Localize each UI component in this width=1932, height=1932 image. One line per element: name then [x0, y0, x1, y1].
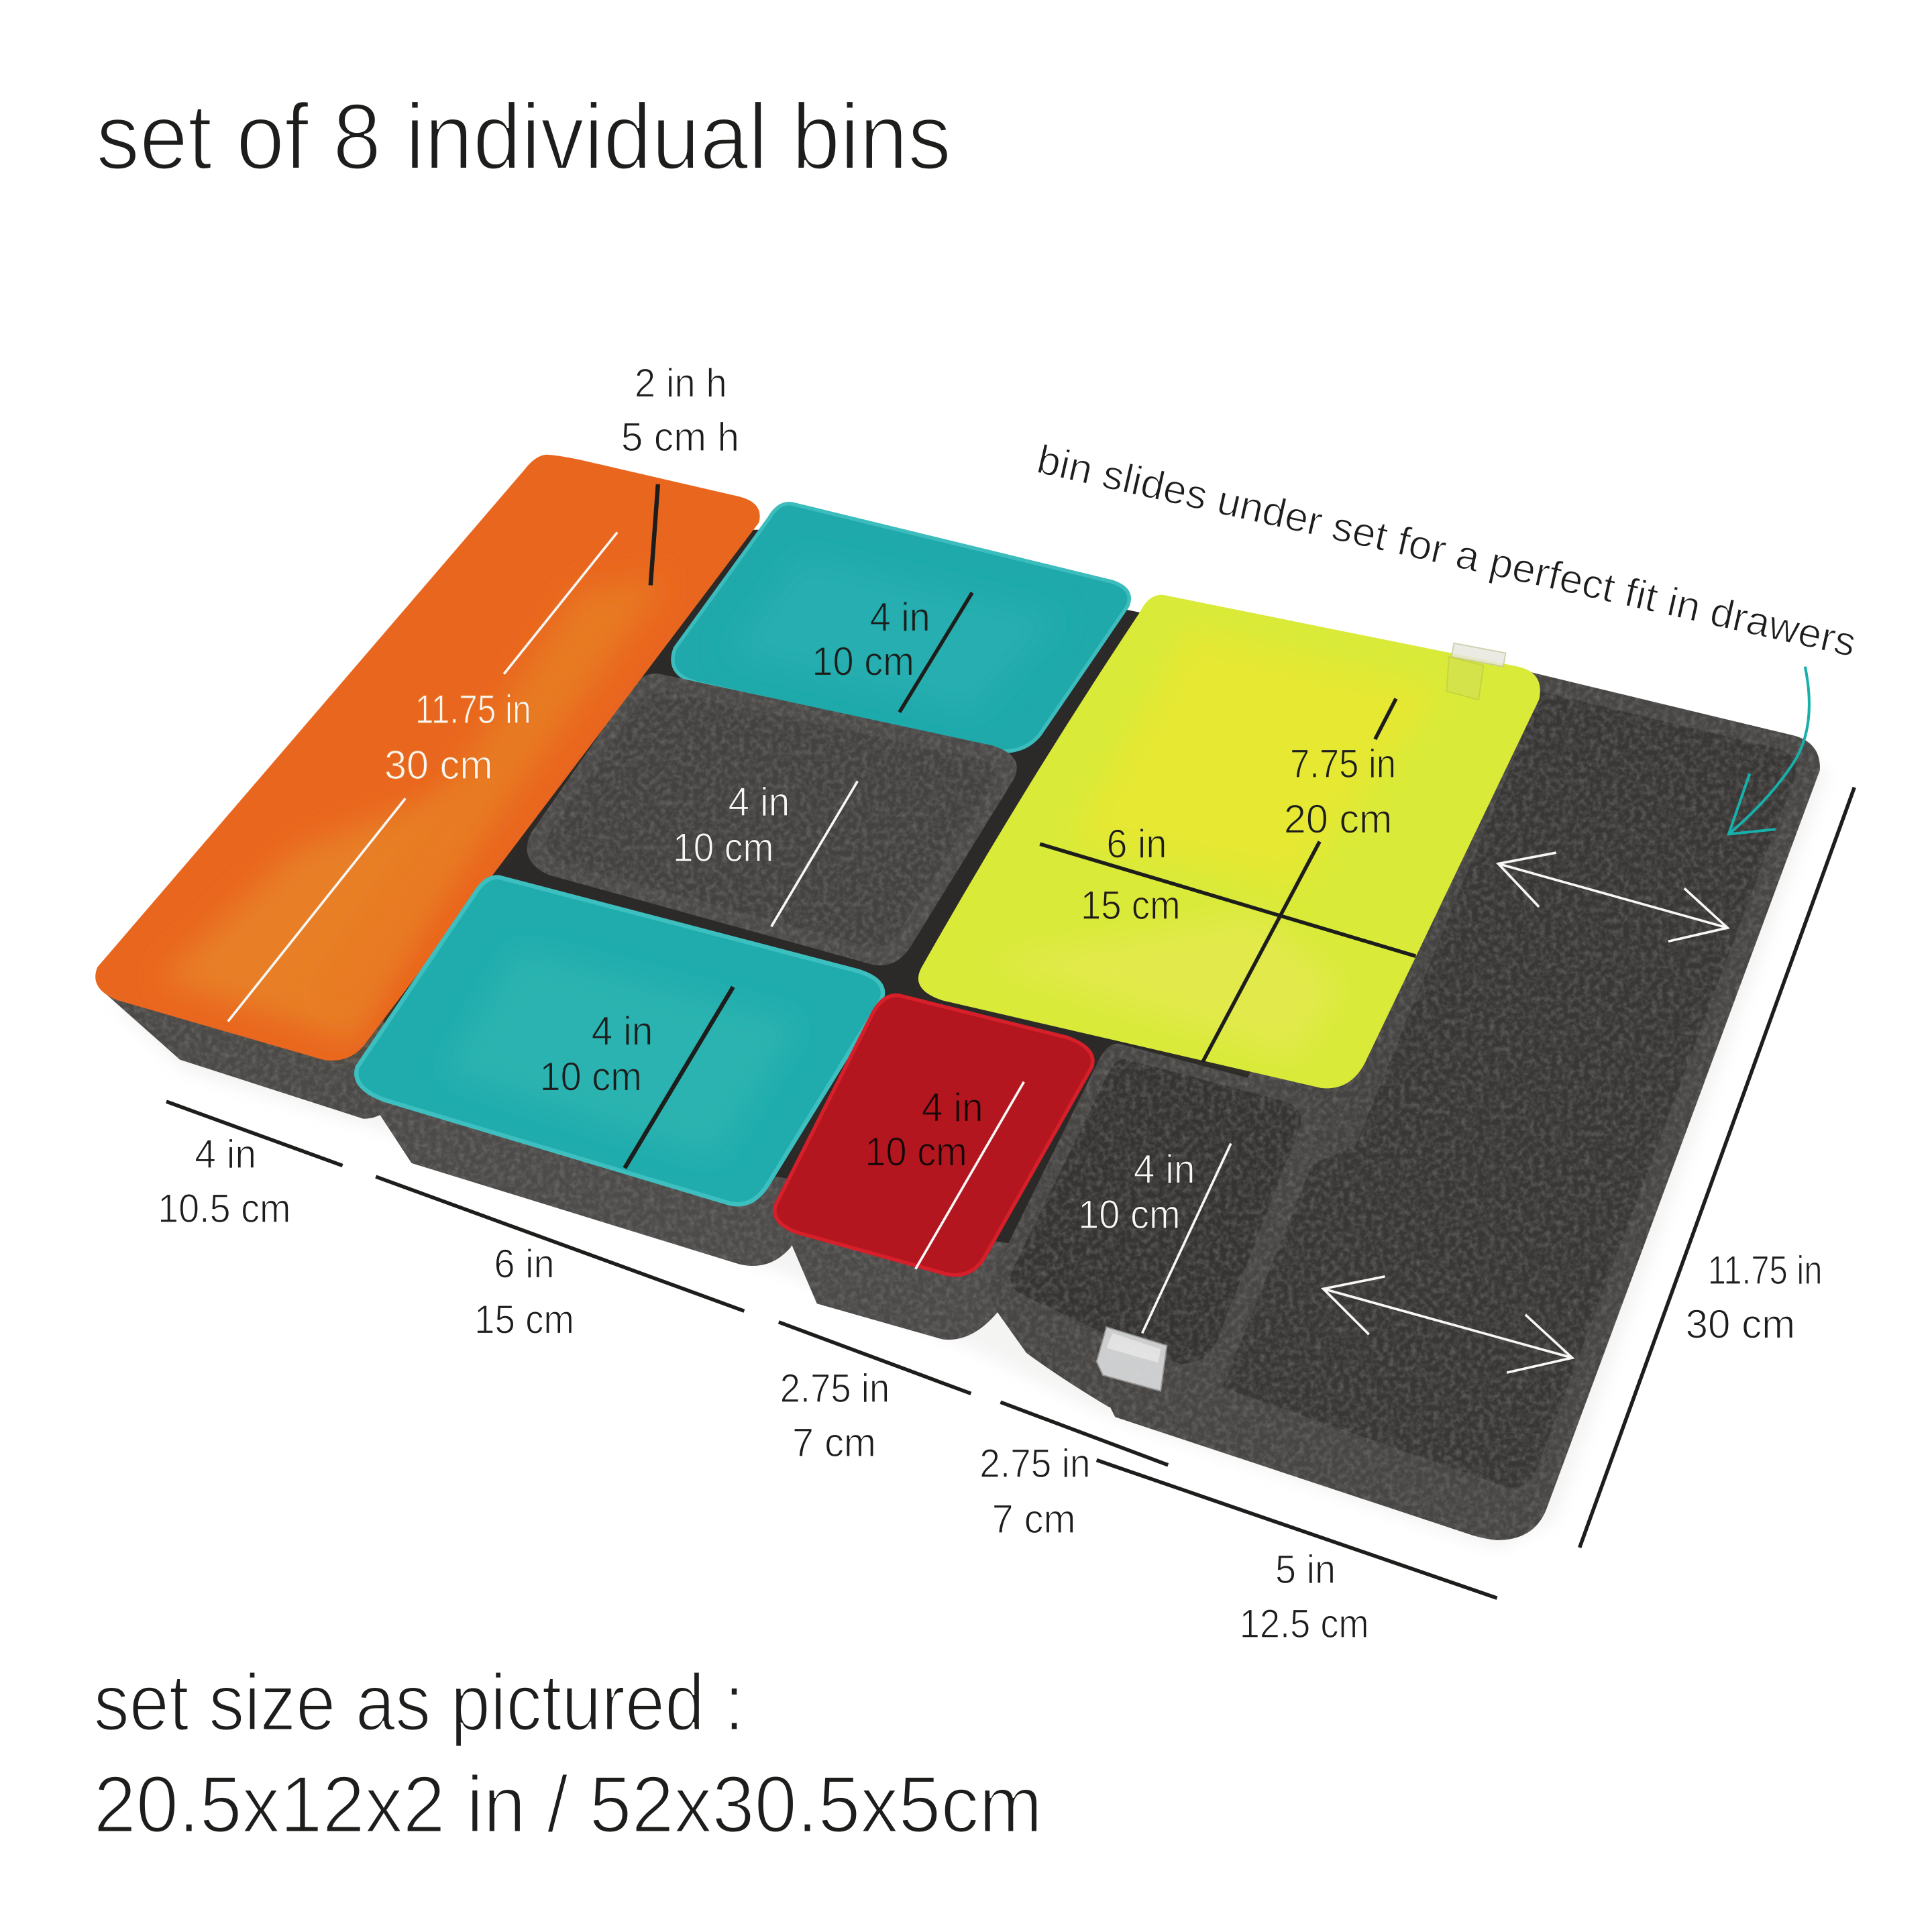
teal front floor	[443, 949, 801, 1159]
bin: red	[775, 996, 1093, 1340]
lime bin interior	[918, 595, 1540, 1088]
orange bin interior	[95, 455, 760, 1061]
acrylic clip on lime bin	[1446, 643, 1505, 700]
label: orange 11.75 in: 30 cm	[384, 742, 493, 788]
teal top interior	[673, 504, 1129, 751]
lime bin side wall	[1281, 720, 1528, 1152]
tray body	[1097, 672, 1820, 1540]
arrow: upper double-headed slide arrow	[1498, 853, 1727, 941]
soft ground shadow	[111, 739, 1830, 1550]
dimension line: teal top	[900, 592, 972, 712]
bin: lime large	[918, 595, 1540, 1152]
tray floor	[1222, 690, 1796, 1487]
title: set of 8 individual bins	[96, 85, 951, 189]
dimension line: 2.75 in bottom	[779, 1322, 971, 1393]
dimension line: lime length upper	[1375, 698, 1396, 739]
label: lime 6 in	[1081, 820, 1181, 928]
red bin interior	[775, 996, 1093, 1275]
charcoal middle body	[527, 674, 1017, 965]
label: teal front 4 in: 4 in	[592, 1008, 653, 1054]
charcoal middle floor	[546, 690, 996, 947]
red bin outer wall	[784, 1226, 1016, 1340]
label: 2 in h: 5 cm h	[621, 414, 739, 460]
label: second bottom 2.75 in: 2.75 in	[979, 1440, 1091, 1486]
set size values: 20.5x12x2 in / 52x30.5x5cm	[94, 1760, 1042, 1849]
label: bottom 5 in: 12.5 cm	[1240, 1601, 1369, 1646]
dimension line: second 2.75 in bottom	[1000, 1402, 1168, 1465]
arrow: lower double-headed slide arrow	[1324, 1277, 1572, 1373]
dimension line: teal front	[625, 987, 733, 1168]
gaps between bins: dark underlay	[351, 530, 1515, 1306]
dimension line: 11.75 in right	[1580, 788, 1854, 1548]
label: bottom 5 in: 5 in	[1275, 1546, 1336, 1592]
bin: orange long	[95, 455, 760, 1119]
dimension line: 6 in bottom	[376, 1177, 744, 1311]
dimension line: small charcoal	[1142, 1143, 1231, 1333]
label: bottom 6 in	[474, 1241, 574, 1342]
label: teal top 4 in: 4 in	[870, 594, 930, 639]
label: orange 11.75 in	[384, 686, 531, 788]
dimension line: orange lower	[228, 798, 405, 1022]
callout: slanted note: bin slides under set for a perfect fit in drawers	[1033, 436, 1860, 665]
dimension line: bin height	[651, 484, 658, 585]
label: teal top 4 in	[812, 594, 930, 684]
label: second bottom 2.75 in: 7 cm	[992, 1496, 1075, 1542]
teal top floor	[727, 555, 1060, 714]
teal front interior	[356, 877, 883, 1204]
label: right 11.75 in: 30 cm	[1686, 1301, 1795, 1347]
dimension line: 4 in bottom	[166, 1102, 343, 1166]
label: bottom 2.75 in	[780, 1365, 890, 1465]
label: lime 7.75 in	[1284, 741, 1396, 842]
orange bin outer wall	[103, 961, 394, 1119]
label: second bottom 2.75 in	[979, 1440, 1091, 1542]
dimension line: red	[916, 1082, 1024, 1269]
dimension line: charcoal middle	[771, 781, 857, 926]
label: bottom 2.75 in: 7 cm	[792, 1419, 876, 1465]
label: red 4 in: 10 cm	[865, 1129, 967, 1175]
label: small charcoal 4 in: 10 cm	[1078, 1191, 1181, 1237]
label: lime 7.75 in: 7.75 in	[1290, 741, 1396, 786]
label: teal front 4 in: 10 cm	[539, 1054, 642, 1099]
orange bin warm right side	[308, 579, 665, 1022]
label: bottom 6 in: 6 in	[494, 1241, 555, 1287]
label: right 11.75 in: 11.75 in	[1708, 1247, 1823, 1293]
bin: small charcoal	[990, 1044, 1318, 1407]
small charcoal body	[990, 1044, 1318, 1407]
label: bottom 4 in: 10.5 cm	[158, 1185, 290, 1231]
label: bottom 4 in: 4 in	[195, 1131, 256, 1177]
label: charcoal middle 4 in: 10 cm	[673, 824, 773, 870]
dimension line: lime length lower	[1203, 841, 1320, 1062]
label: 2 in h	[621, 360, 739, 460]
lime bin lower glow	[985, 912, 1343, 1060]
label: orange 11.75 in: 11.75 in	[415, 686, 531, 732]
label: charcoal middle 4 in: 4 in	[729, 779, 790, 824]
label: red 4 in	[865, 1084, 983, 1175]
label: teal top 4 in: 10 cm	[812, 639, 914, 684]
bin: teal front	[356, 877, 883, 1266]
acrylic clip on small bin	[1097, 1327, 1167, 1391]
dimension line: orange upper	[504, 532, 617, 674]
arrow: teal curved pointer	[1729, 667, 1809, 834]
label: bottom 5 in	[1240, 1546, 1369, 1646]
label: charcoal middle 4 in	[673, 779, 790, 870]
small charcoal floor	[1010, 1059, 1301, 1364]
label: bottom 2.75 in: 2.75 in	[780, 1365, 890, 1411]
label: lime 7.75 in: 20 cm	[1284, 796, 1393, 842]
teal front outer wall	[370, 1084, 813, 1266]
dimension line: lime width	[1040, 844, 1415, 956]
bin: charcoal middle	[527, 674, 1017, 965]
label: bottom 4 in	[158, 1131, 290, 1231]
label: lime 6 in: 15 cm	[1081, 882, 1181, 928]
label: right 11.75 in	[1686, 1247, 1823, 1347]
bin: teal top	[673, 504, 1129, 751]
label: 2 in h: 2 in h	[635, 360, 727, 405]
label: small charcoal 4 in	[1078, 1146, 1195, 1237]
bin: large charcoal sliding tray	[1097, 672, 1820, 1540]
label: small charcoal 4 in: 4 in	[1134, 1146, 1195, 1191]
label: red 4 in: 4 in	[922, 1084, 983, 1130]
label: bottom 6 in: 15 cm	[474, 1296, 574, 1342]
label: lime 6 in: 6 in	[1106, 820, 1167, 866]
dimension line: 5 in bottom	[1097, 1460, 1497, 1598]
label: teal front 4 in	[539, 1008, 653, 1099]
set size heading: set size as pictured :	[94, 1658, 744, 1748]
lime bin inner glow	[1072, 629, 1442, 887]
orange bin warm floor	[160, 776, 493, 1041]
